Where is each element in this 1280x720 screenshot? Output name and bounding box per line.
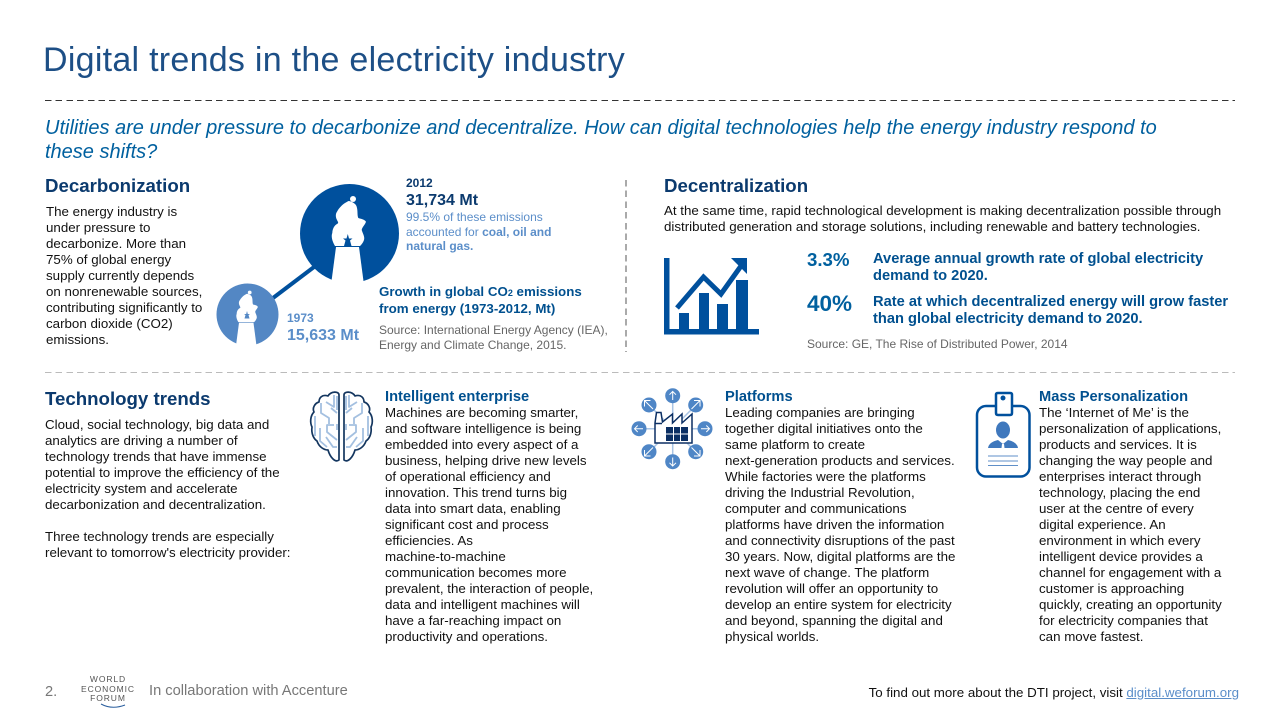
stat: 3.3%: Average annual growth rate of global electricity [873,251,1203,267]
logo: World Economic Forum: ECONOMIC [81,684,135,694]
stat: 40%: Rate at which decentralized energy will grow faster [873,294,1228,310]
chart caption [379,284,582,316]
stat: 3.3%: 3.3% [807,249,850,270]
chart caption: Growth in global CO2 emissions [379,284,582,299]
footer: collaboration: In collaboration with Accenture [149,683,348,699]
heading: technology trends: Technology trends [45,388,211,409]
stat: 3.3%: demand to 2020. [873,268,988,284]
text: decentralization: At the same time, rapid technological development is making decentralization possible through distributed generation and storage solutions, including renewable and battery technologies. [664,203,1221,234]
footer: link: To find out more about the DTI project, visit digital.weforum.org [869,685,1239,700]
heading: decentralization: Decentralization [664,175,808,196]
label: 1973 emissions: 15,633 Mt [287,327,359,344]
stat: 3.3% [807,249,1203,284]
heading: decarbonization: Decarbonization [45,175,190,196]
icon: brain circuit [310,391,374,462]
source: GE: Source: GE, The Rise of Distributed Power, 2014 [807,337,1068,351]
source: IEA: Source: International Energy Agency (IEA), Energy and Climate Change, 2015. [379,323,608,352]
label: 1973 emissions [287,311,359,344]
stat: 40% [807,291,1228,327]
icon: ID badge [976,392,1031,478]
column: intelligent enterprise: Machines are becoming smarter, and software intelligence is being embedded into every aspect of a business, helping drive new levels of operational efficiency and innovation. This trend turns big data into smart data, enabling significant cost and process efficiencies. As machine-to-machine communication becomes more prevalent, the interaction of people, data and intelligent machines will have a far-reaching impact on productivity and operations. [385,405,593,644]
label: 2012 emissions [406,176,551,253]
label: 2012 emissions: 31,734 Mt [406,192,478,209]
title: Digital trends in the electricity industry [43,41,625,79]
logo: World Economic Forum: FORUM [90,693,126,703]
label: 2012 emissions: 2012 [406,176,433,190]
chart caption: from energy (1973-2012, Mt) [379,301,555,316]
column: mass personalization: Mass Personalization [1039,389,1188,405]
icon: growth bar chart [664,258,759,334]
intro question: Utilities are under pressure to decarbonize and decentralize. How can digital technologies help the energy industry respond to these shifts? [45,117,1157,163]
column: platforms: Platforms [725,389,793,405]
column: mass personalization: The ‘Internet of Me’ is the personalization of applications, products and services. It is changing the way people and enterprises interact through technology, placing the end user at the centre of every digital experience. An environment in which every intelligent device provides a channel for engagement with a customer is approaching quickly, creating an opportunity for electricity companies that can move fastest. [1039,405,1222,644]
text: decarbonization: The energy industry is under pressure to decarbonize. More than 75% of global energy supply currently depends on nonrenewable sources, contributing significantly to carbon dioxide (CO2) emissions. [46,204,202,347]
column: platforms: Leading companies are bringing together digital initiatives onto the same platform to create next-generation products and services. While factories were the platforms driving the Industrial Revolution, computer and communications platforms have driven the information and connectivity disruptions of the past 30 years. Now, digital platforms are the next wave of change. The platform revolution will offer an opportunity to develop an entire system for electricity and beyond, spanning the digital and physical worlds. [725,405,955,644]
column: intelligent enterprise: Intelligent enterprise [385,389,529,405]
label: 1973 emissions: 1973 [287,311,314,325]
icon: factory platform [632,388,712,470]
page number: 2. [45,684,57,700]
logo: World Economic Forum: WORLD [90,674,126,684]
stat: 40%: 40% [807,291,852,316]
label: 2012 emissions: 99.5% of these emissions accounted for coal, oil and natural gas. [406,210,551,253]
text: technology trends: Cloud, social technology, big data and analytics are driving a number of technology trends that have immense potential to improve the efficiency of the electricity system and accelerate decarbonization and decentralization. Three technology trends are especially relevant to tomorrow's electricity provider: [45,417,290,560]
chart: CO2 emissions circles [216,184,399,344]
stat: 40%: than global electricity demand to 2020. [873,311,1143,327]
logo: World Economic Forum [81,674,135,708]
